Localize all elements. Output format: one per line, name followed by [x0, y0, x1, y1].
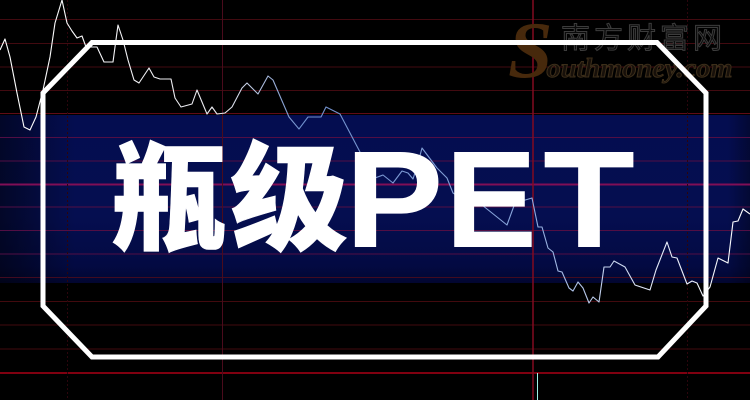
octagon frame: [43, 42, 706, 357]
title: PET letters: T: [543, 123, 635, 277]
title: PET letters: [345, 123, 635, 277]
title: PET letters: E: [445, 123, 537, 277]
price line: [0, 0, 750, 303]
watermark chinese name: 南方财富网: [561, 15, 726, 57]
watermark domain: Southmoney.com: [508, 7, 732, 95]
watermark: southmoney logo: [508, 7, 732, 95]
blue band: [0, 115, 750, 283]
title: chinese characters: 瓶级: [110, 135, 350, 267]
cyan volume tick: [536, 373, 538, 400]
title: PET letters: P: [345, 123, 443, 277]
title: [110, 123, 635, 277]
